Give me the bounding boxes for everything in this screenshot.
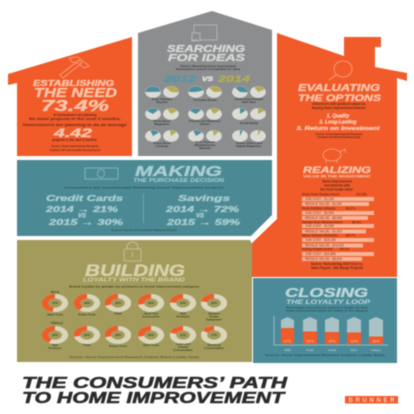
panel: closing the loyalty loop	[253, 278, 397, 363]
pie chart labels: Magazines	[154, 122, 170, 126]
text: projects and source	[50, 138, 100, 152]
legend: 2012 vs 2014	[162, 74, 251, 85]
female donut values and labels: 29%	[115, 333, 121, 337]
stat: credit cards: VS	[78, 214, 86, 220]
panel background	[253, 278, 397, 363]
pie charts grid	[142, 84, 269, 143]
text: realizing source: Value Report - Mid-Range Projects	[311, 266, 363, 270]
icon: padlock	[124, 242, 141, 261]
pie chart labels: Store Displays	[152, 97, 173, 101]
pie chart labels	[152, 97, 263, 150]
retailer labels: Kobalt	[328, 348, 336, 352]
text: intro: Influencers with greatest impact on	[312, 102, 366, 106]
female donut values and labels	[48, 333, 224, 352]
cost versus resale bars: RESALE VALUE - $14,919	[305, 244, 344, 248]
female donut values and labels: 42%	[52, 333, 58, 337]
female donut values and labels: 17%	[211, 333, 217, 337]
male donut values and labels: Outdoor	[208, 312, 221, 316]
text: intro: Brand loyalty by gender by products in home improvement category	[69, 284, 199, 288]
label: female: FEMALE	[51, 321, 63, 325]
text: intro: Buying Home Improvement brands:	[312, 106, 366, 110]
text: realizing intro	[320, 180, 354, 192]
stat: credit cards: Credit Cards	[46, 193, 123, 203]
pie chart labels: Website	[199, 146, 211, 150]
text: intro: Percentage of purchasers loyal to a retailer for their	[286, 306, 368, 310]
cost versus resale bars	[302, 192, 374, 261]
icon: devices	[191, 25, 217, 41]
female donut values and labels: Lawn and	[176, 342, 190, 346]
heading: establishing the need: ESTABLISHING	[33, 78, 114, 88]
text: intro: Source: Measuring Home Improvement	[180, 64, 236, 68]
text: projects and source: Source: Home Improvement Research	[52, 144, 99, 148]
cost versus resale bars: RESALE VALUE - $8,944	[305, 257, 342, 261]
logo: brunner: BRUNNER	[348, 398, 395, 404]
text: planning description: for more projects in the next 3 months.	[29, 117, 121, 121]
text: source: Source: Survey of Consumer Payment Choice	[111, 228, 177, 232]
panel: building loyalty with the brand	[17, 240, 252, 362]
male donut values and labels: Power Tools	[78, 312, 96, 316]
pie chart labels: Online Videos and	[236, 141, 262, 145]
cost versus resale bars: JOB COST - $1,595	[305, 224, 334, 228]
cost versus resale bars: Entry Door Replacement	[302, 192, 340, 196]
retailer labels: Behr	[351, 348, 357, 352]
cost versus resale bars: 85.2%	[340, 247, 349, 251]
text: intro: Homeowners sources of inspiration for ideas	[176, 67, 240, 71]
cost versus resale bars: Minor Kitchen Remodel	[302, 234, 338, 238]
label: male: MALE	[51, 290, 59, 294]
pie chart labels: TV Home Shows	[193, 98, 217, 102]
cost versus resale bars: Deck Addition (Wood)	[302, 206, 335, 210]
pie chart labels: Web Sites	[242, 100, 256, 104]
legend: 2012 vs 2014: VS	[202, 77, 213, 83]
chart axes	[274, 316, 388, 345]
stat: savings: VS	[196, 214, 204, 220]
female donut values and labels: Consumables	[173, 348, 193, 352]
title: THE CONSUMERS’ PATH	[22, 375, 288, 392]
cost versus resale bars: JOB COST - $10,868	[305, 252, 336, 256]
text: planning description: Homeowners are planning to do an average	[23, 123, 127, 127]
title: TO HOME IMPROVEMENT	[22, 390, 286, 407]
pie chart labels: Home Decor	[153, 119, 172, 123]
text: source	[316, 132, 363, 139]
house shape	[138, 11, 272, 156]
cost versus resale bars: 80.2%	[346, 206, 355, 210]
heading: searching for ideas: FOR IDEAS	[168, 53, 245, 64]
pie chart labels: Social Media	[240, 121, 258, 125]
divider	[142, 194, 145, 223]
heading: realizing: REALIZING	[303, 165, 371, 175]
pie chart labels: Catalogs	[156, 144, 169, 148]
cost versus resale bars: JOB COST - $1,230	[305, 197, 334, 201]
pie chart labels: Big Box	[156, 100, 168, 104]
pie chart labels: Homes	[200, 122, 210, 126]
bar: 67 percent: 67%	[284, 340, 292, 344]
pie chart labels: Home Decor	[153, 141, 172, 145]
cost versus resale bars: 101.8%	[356, 192, 367, 196]
stat: savings: 2015 → 59%	[166, 217, 241, 227]
male donut values and labels: Products	[176, 314, 190, 318]
text: realizing source: Source: Remodeling 2015 Cost vs.	[311, 262, 363, 266]
heading: searching for ideas	[167, 44, 245, 64]
title	[22, 375, 288, 407]
stat: savings	[165, 193, 241, 227]
panel: making the purchase decision	[17, 160, 272, 236]
text: realizing intro: investments with	[324, 184, 350, 188]
female donut values and labels: Electrical	[207, 343, 221, 347]
house bar chart	[274, 316, 388, 345]
house shape with chimney	[252, 33, 407, 277]
text: projects and source: Institute, DIY and Installed Spring Report	[50, 148, 100, 152]
male donut values and labels: 47%	[52, 301, 58, 305]
pie chart labels: Friends and Relatives'	[189, 119, 221, 123]
panel: evaluating the options and realizing value	[252, 33, 407, 277]
subheading: loyalty with the brand: LOYALTY WITH THE BRAND	[83, 278, 186, 284]
text: source: Source: Home Improvement Research	[316, 132, 363, 136]
text: source: Institute and Brand Building Study	[318, 135, 361, 139]
male donut values and labels: 28%	[148, 301, 154, 305]
stat: credit cards: 2015 → 30%	[47, 217, 124, 227]
legend: 2012 vs 2014: 2012	[162, 74, 197, 85]
retailer labels: ACE	[283, 348, 292, 352]
bar: 50 percent: 50%	[306, 340, 314, 344]
text: realizing intro: Home Improvement	[322, 180, 353, 184]
pie chart labels: Home Improvement	[235, 97, 263, 101]
male donut values and labels: Hand Tools	[47, 312, 63, 316]
heading: evaluating the options: EVALUATING	[298, 83, 380, 94]
text: realizing intro: the most resale value:	[320, 188, 354, 192]
subheading: the purchase decision: THE PURCHASE DECISION	[133, 178, 225, 184]
cost versus resale bars: RESALE VALUE - $8,998	[305, 216, 342, 220]
ranked list: 1. Quality	[327, 114, 349, 120]
male donut values and labels: 24%	[180, 301, 186, 305]
text: intro	[176, 64, 240, 71]
stat: credit cards: 2014 → 21%	[45, 204, 119, 214]
text: realizing source	[311, 262, 363, 270]
retailer labels	[283, 348, 381, 352]
male donut values and labels: Paint	[114, 312, 122, 316]
male donut values and labels: 30%	[115, 301, 121, 305]
pie chart labels: Manufacturers	[195, 143, 216, 147]
female donut values and labels: Garden	[178, 345, 188, 349]
stat: savings: 2014 → 72%	[165, 204, 240, 214]
cost versus resale bars: JOB COST - $19,226	[305, 238, 336, 242]
stat: 73.4 percent: 73.4%	[41, 98, 109, 115]
retailer labels: Ryobi	[306, 348, 314, 352]
icon: money bill	[85, 168, 118, 179]
male donut values and labels	[47, 301, 222, 322]
heading: establishing the need	[33, 78, 118, 100]
ranked list: 2. Long-Lasting	[318, 120, 357, 126]
ranked list	[296, 114, 380, 132]
ranked list: 3. Return on Investment	[296, 126, 380, 132]
icon: magnifying glass	[329, 61, 352, 80]
panel: establishing the need	[8, 37, 132, 156]
text: source: Source: Home Improvement Research Institute Loyalty Study	[265, 354, 386, 357]
bar: 35 percent: 35%	[372, 340, 380, 344]
retailer labels: Valspar	[371, 348, 381, 352]
text: intro: home improvement needs by retailer in the category	[286, 308, 369, 312]
female donut values and labels: Consumables	[204, 346, 224, 350]
icon: hammer	[60, 57, 89, 78]
text: source: Source: Home Improvement Research Institute Brand Loyalty Study	[69, 355, 200, 359]
heading: establishing the need: THE NEED	[34, 85, 118, 100]
cost versus resale bars: RESALE VALUE - $1,252	[305, 202, 342, 206]
male donut values and labels: Equipment	[206, 318, 222, 322]
text: planning description	[23, 113, 127, 127]
panel background	[17, 160, 272, 236]
panel background	[17, 240, 252, 362]
text: intro	[286, 306, 369, 312]
heading: closing: CLOSING	[285, 285, 368, 300]
text: planning description: of homeowners are planning	[53, 113, 97, 117]
female donut values and labels: Wall	[52, 343, 58, 347]
male donut values and labels: 40%	[84, 301, 90, 305]
heading: evaluating the options: THE OPTIONS	[298, 93, 382, 104]
male donut charts	[45, 296, 224, 310]
pie chart labels: Do-It-Yourself	[195, 140, 215, 144]
heading: building: BUILDING	[85, 262, 185, 280]
male donut values and labels: Wall	[180, 312, 186, 316]
cost versus resale bars: 88.4%	[352, 220, 361, 224]
heading: searching for ideas: SEARCHING	[167, 44, 245, 55]
subheading: the loyalty loop: THE LOYALTY LOOP	[286, 299, 371, 306]
female donut values and labels: Paint	[83, 343, 91, 347]
stat: 4.42 projects: 4.42	[52, 126, 93, 140]
female donut values and labels: 28%	[148, 333, 154, 337]
male donut values and labels: Power	[209, 314, 219, 318]
stat: credit cards	[45, 193, 124, 227]
pie chart labels: Digital Magazines	[236, 144, 262, 148]
text: intro	[312, 102, 366, 110]
female donut values and labels: Products	[48, 346, 62, 350]
panel: searching for ideas	[138, 11, 272, 156]
female donut values and labels: 21%	[180, 333, 186, 337]
subheading: value in the investment: VALUE IN THE INVESTMENT	[303, 174, 372, 178]
cost versus resale bars: Garage Door Replacement	[302, 220, 343, 224]
cost versus resale bars: JOB COST - $9,500	[305, 211, 334, 215]
text: intro: Consumers are increasingly financing home improvement projects	[64, 186, 225, 190]
heading: making: MAKING	[135, 163, 222, 180]
female donut values and labels: 28%	[84, 333, 90, 337]
icon: piggy bank	[323, 149, 346, 163]
text: projects and source: projects in the next 3 months.	[52, 138, 98, 142]
logo: brunner	[345, 396, 398, 404]
female donut values and labels: Hand Tools	[143, 343, 159, 347]
bar: 46 percent: 46%	[350, 340, 358, 344]
legend: 2012 vs 2014: 2014	[216, 74, 251, 85]
cost versus resale bars: Siding Replacement	[302, 247, 333, 251]
male donut values and labels: Accessories	[142, 314, 160, 318]
stat: savings: Savings	[178, 193, 230, 203]
female donut values and labels: Power Tools	[109, 344, 127, 348]
bar: 49 percent: 49%	[328, 340, 336, 344]
male donut values and labels: Hand Tool	[144, 312, 158, 316]
heading: evaluating the options	[298, 83, 382, 104]
cost versus resale bars: RESALE VALUE - $1,410	[305, 230, 342, 234]
cost versus resale bars: 85.7%	[346, 234, 355, 238]
female donut charts	[45, 328, 224, 342]
male donut values and labels: 22%	[211, 301, 217, 305]
house shape	[8, 37, 132, 156]
